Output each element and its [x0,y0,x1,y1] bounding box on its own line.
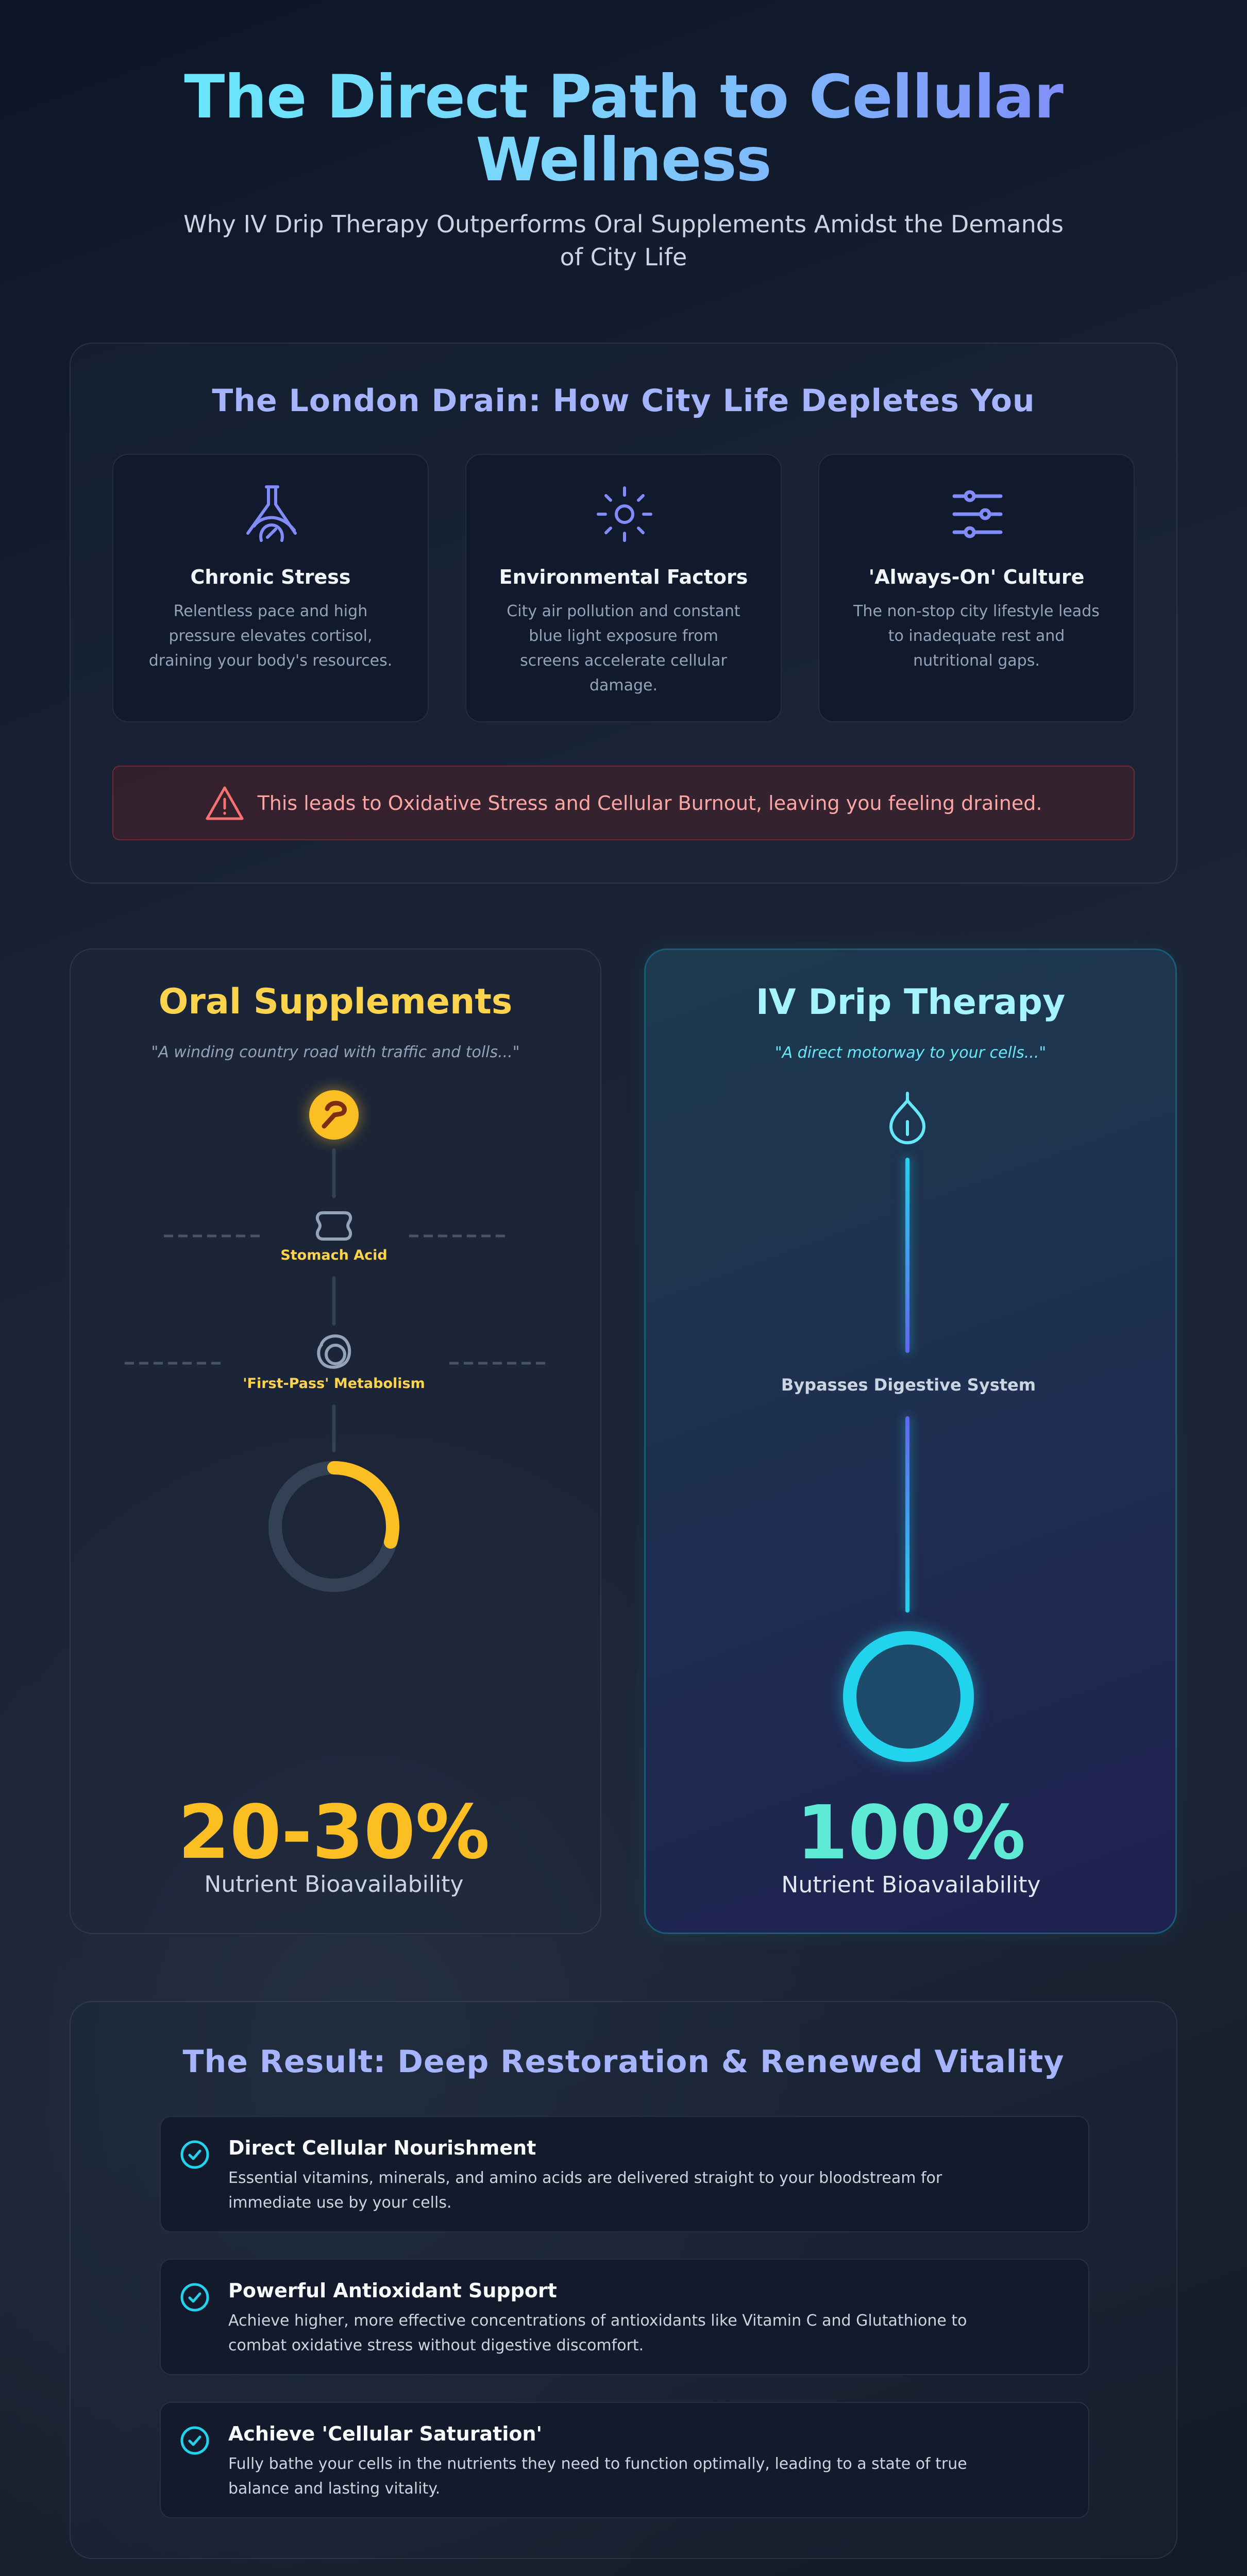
card title: Environmental Factors [499,566,748,588]
item: cellular saturation: balance and lasting vitality. [228,2480,440,2498]
panel: oral supplements [70,948,601,1934]
card text: screens accelerate cellular [520,652,727,670]
item: cellular saturation [160,2402,1089,2518]
card: chronic stress [112,454,429,722]
stat label: Nutrient Bioavailability [781,1872,1041,1898]
item: antioxidant support: combat oxidative stress without digestive discomfort. [228,2336,644,2354]
callout: warning [112,766,1135,840]
card text: The non-stop city lifestyle leads [853,602,1100,620]
item: cellular saturation: Achieve 'Cellular Saturation' [228,2422,542,2445]
heading: result: The Result: Deep Restoration & Renewed Vitality [183,2044,1064,2080]
icon: sliders [952,490,1003,538]
item: direct cellular nourishment: Direct Cellular Nourishment [228,2137,536,2159]
panel: the result [70,2001,1177,2559]
stat: 20-30%: 20-30% [178,1789,490,1875]
card text: blue light exposure from [529,627,718,645]
card text: to inadequate rest and [888,627,1065,645]
subtitle: Why IV Drip Therapy Outperforms Oral Supplements Amidst the Demands [183,210,1064,238]
quote: "A winding country road with traffic and tolls..." [151,1043,520,1061]
icon: check [180,2283,209,2311]
label: stomach acid: Stomach Acid [280,1247,387,1263]
title [160,66,1087,192]
label: first-pass metabolism: 'First-Pass' Metabolism [243,1376,425,1392]
card title: 'Always-On' Culture [869,566,1084,588]
card text: Relentless pace and high [174,602,367,620]
diagram: iv pathway [834,1092,983,1772]
icon: pill circle [309,1090,359,1140]
heading: iv drip therapy: IV Drip Therapy [756,982,1065,1023]
icon: sun [597,486,652,542]
card text [507,602,740,694]
panel: the london drain [70,343,1177,884]
stat: 100%: 100% [797,1789,1025,1876]
heading: oral supplements: Oral Supplements [159,981,512,1022]
card text: draining your body's resources. [149,652,392,670]
warning text: This leads to Oxidative Stress and Cellular Burnout, leaving you feeling drained. [258,791,1042,814]
diagram: oral pathway [125,1081,545,1592]
title: Wellness [476,125,771,195]
icon: metabolism [318,1336,349,1367]
card text: pressure elevates cortisol, [168,627,373,645]
card title: Chronic Stress [191,566,350,588]
card text: nutritional gaps. [913,652,1040,670]
circle: 100% [850,1638,967,1755]
icon: stomach [317,1213,350,1239]
item: antioxidant support [160,2259,1089,2375]
item: antioxidant support: Powerful Antioxidant Support [228,2279,557,2302]
panel: iv drip therapy [644,948,1177,1934]
card: always-on culture [818,454,1135,722]
item: cellular saturation: Fully bathe your cells in the nutrients they need to function optimally, leading to a state of true [228,2455,967,2473]
line: top [905,1158,909,1353]
icon: flask [246,485,297,542]
icon: check [180,2427,209,2454]
card text: damage. [589,676,658,694]
heading: london drain: The London Drain: How City Life Depletes You [212,383,1035,419]
item: direct cellular nourishment: immediate use by your cells. [228,2194,452,2212]
item: direct cellular nourishment [160,2116,1089,2232]
line: bottom [905,1416,909,1613]
item: direct cellular nourishment: Essential vitamins, minerals, and amino acids are delivered straight to your bloodstream for [228,2169,942,2187]
icon: drop [891,1093,924,1143]
title: The Direct Path to Cellular [184,62,1063,132]
card text: City air pollution and constant [507,602,740,620]
quote: "A direct motorway to your cells..." [775,1044,1046,1062]
stat label: Nutrient Bioavailability [204,1871,464,1897]
label: bypasses: Bypasses Digestive System [781,1375,1036,1395]
icon: check [180,2140,209,2169]
icon: warning triangle [206,786,243,820]
card text [149,602,392,670]
card text [853,602,1100,670]
subtitle [183,210,1064,271]
subtitle: of City Life [560,243,687,271]
card: environmental factors [465,454,782,722]
item: antioxidant support: Achieve higher, more effective concentrations of antioxidants like Vitamin C and Glutathione to [228,2312,967,2330]
ring: 20-30% [275,1468,393,1585]
